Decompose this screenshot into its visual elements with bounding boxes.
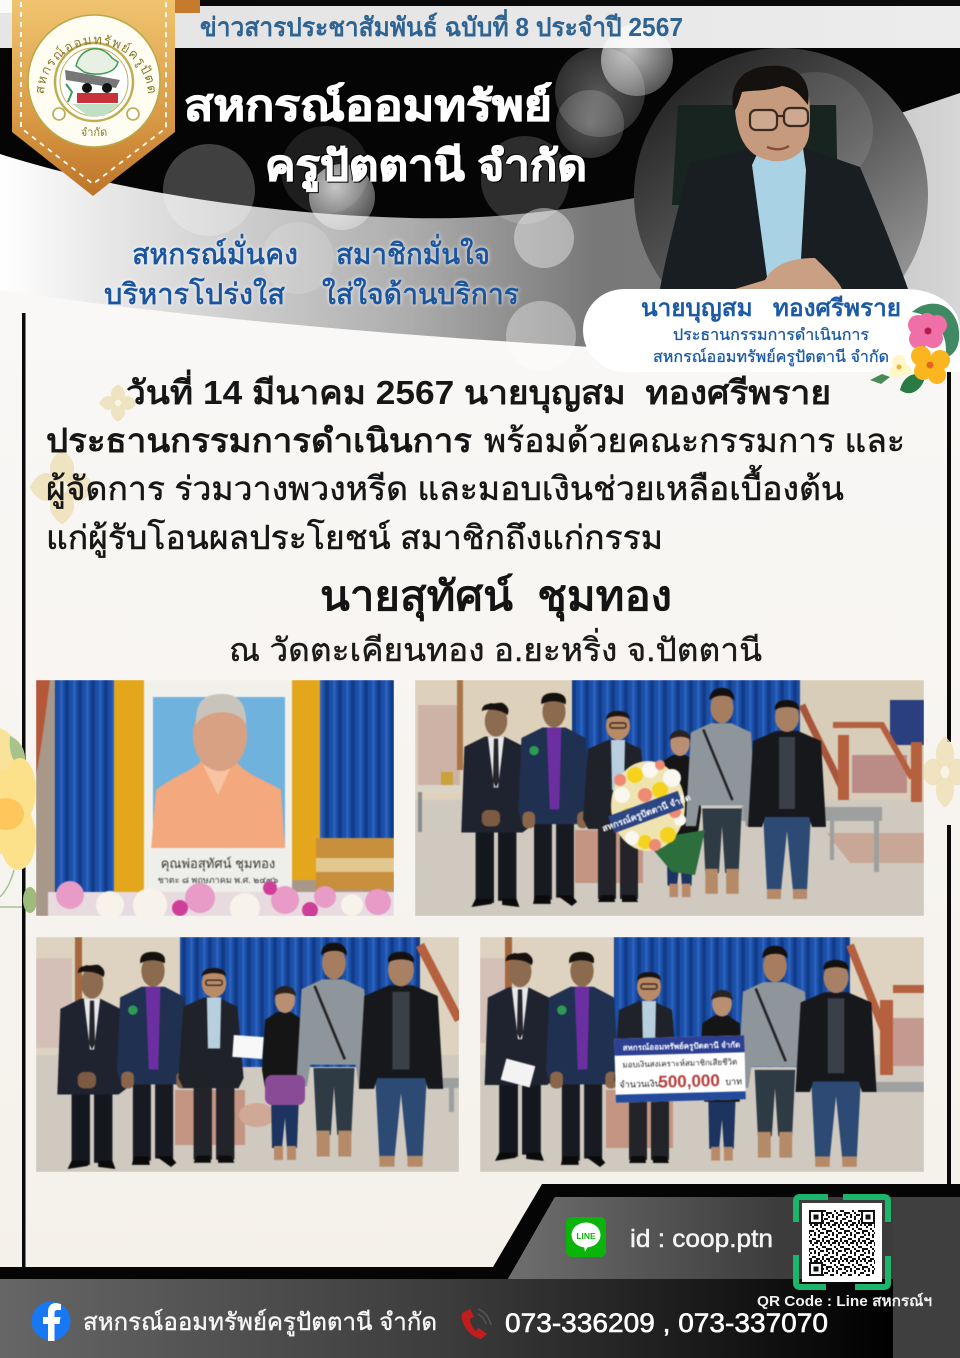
logo bottom text: จำกัด — [81, 127, 107, 139]
presentation board: 500,000 — [658, 1071, 720, 1092]
slogans: สมาชิกมั่นใจ — [336, 234, 490, 271]
logo ring text — [44, 44, 148, 96]
blue curtain — [571, 680, 801, 763]
window — [418, 705, 460, 790]
people — [485, 946, 877, 1167]
QR caption: QR Code : Line สหกรณ์ฯ — [757, 1292, 932, 1310]
presentation board: จำนวนเงิน — [619, 1079, 661, 1090]
bench — [870, 1082, 924, 1092]
flower arrangement — [48, 880, 394, 916]
newsletter issue line: ข่าวสารประชาสัมพันธ์ ฉบับที่ 8 ประจำปี 2567 — [200, 8, 683, 42]
grey gradient band — [0, 60, 960, 372]
pink cloth — [575, 830, 643, 883]
venue: ณ วัดตะเคียนทอง อ.ยะหริ่ง จ.ปัตตานี — [229, 628, 762, 668]
shirt — [752, 148, 806, 277]
slogans: ใส่ใจด้านบริการ — [322, 277, 519, 311]
organisation title: สหกรณ์ออมทรัพย์ — [184, 82, 552, 129]
facebook page name: สหกรณ์ออมทรัพย์ครูปัตตานี จำกัด — [83, 1308, 437, 1337]
top grey strip — [0, 13, 200, 48]
slogans: สหกรณ์มั่นคง — [132, 234, 298, 271]
ribbon tab — [173, 0, 200, 13]
presentation board: บาท — [725, 1076, 742, 1087]
face — [192, 712, 248, 772]
presentation board — [614, 1035, 746, 1103]
bench — [423, 1078, 459, 1088]
announcement text: ผู้จัดการ ร่วมวางพวงหรีด และมอบเงินช่วยเหลือเบื้องต้น — [46, 465, 844, 509]
funeral wreath — [599, 760, 705, 875]
line id: id : coop.ptn — [630, 1225, 773, 1253]
photo: portrait of the deceased — [36, 680, 394, 923]
shirt — [151, 760, 285, 850]
right fill — [893, 1197, 960, 1358]
blue curtain — [614, 937, 850, 1067]
black chevron outline — [0, 1184, 960, 1279]
bubbles — [163, 24, 673, 371]
presentation board: สหกรณ์ออมทรัพย์ครูปัตตานี จำกัด — [622, 1039, 740, 1053]
tropical flowers — [870, 304, 959, 393]
gold frame — [114, 680, 146, 900]
announcement text: พร้อมด้วยคณะกรรมการ และ — [484, 422, 905, 459]
photo: portrait of the deceased: คุณพ่อสุทัศน์ ชุมทอง — [161, 856, 275, 872]
pink cloth — [175, 1090, 245, 1145]
jacket — [660, 148, 908, 289]
stair rail — [420, 945, 459, 1020]
slogans — [104, 234, 519, 311]
chair — [672, 105, 838, 205]
bench — [741, 807, 882, 821]
hands — [735, 258, 842, 289]
QR code — [796, 1197, 888, 1287]
right stairs — [800, 680, 924, 802]
announcement text — [46, 369, 905, 558]
content frame lines — [22, 313, 951, 1273]
envelope — [232, 1035, 264, 1059]
decorative ornaments — [30, 384, 960, 808]
small table — [415, 785, 467, 792]
icon: LINE — [566, 1217, 606, 1257]
people — [461, 688, 826, 907]
photo: presenting cheque board — [480, 937, 924, 1172]
president organisation: สหกรณ์ออมทรัพย์ครูปัตตานี จำกัด — [653, 347, 889, 367]
wreath ribbon: สหกรณ์ครูปัตตานี จำกัด — [600, 791, 693, 835]
header background — [0, 0, 960, 372]
black curved banner — [0, 48, 960, 218]
backdrop circle — [634, 48, 928, 342]
handbag — [265, 1075, 305, 1105]
stitching — [21, 2, 166, 184]
grey panel — [508, 1197, 960, 1358]
footer band — [0, 1279, 893, 1358]
photo: group with wreath — [415, 680, 924, 916]
window — [480, 958, 505, 1043]
ribbon — [12, 0, 175, 196]
stair rail — [846, 943, 881, 1031]
photo: portrait of the deceased: ชาตะ ๘ พฤษภาคม พ.ศ. ๒๔๙๖ — [158, 875, 279, 885]
hair — [732, 66, 809, 112]
president role: ประธานกรรมการดำเนินการ — [673, 327, 869, 344]
gold cloth table — [316, 838, 394, 890]
plate — [583, 289, 960, 372]
deceased member name: นายสุทัศน์ ชุมทอง — [320, 573, 672, 622]
organisation title: ครูปัตตานี จำกัด — [265, 142, 587, 192]
top black strip — [200, 0, 960, 6]
announcement text: วันที่ 14 มีนาคม 2567 นายบุญสม ทองศรีพราย — [126, 369, 831, 414]
left yellow flower — [0, 728, 37, 913]
organisation title — [184, 82, 587, 192]
floor spot — [239, 1103, 275, 1127]
caption card — [152, 847, 286, 888]
blue curtain — [54, 680, 115, 893]
icon: phone — [462, 1309, 491, 1339]
logo seal — [27, 14, 161, 148]
phone numbers: 073-336209 , 073-337070 — [505, 1308, 828, 1338]
people — [57, 943, 443, 1169]
pink cloth — [606, 1090, 673, 1148]
mouth — [767, 146, 789, 149]
name plate — [583, 289, 960, 393]
icon: Facebook — [32, 1302, 70, 1341]
presentation board: มอบเงินสงเคราะห์สมาชิกเสียชีวิต — [622, 1057, 737, 1070]
portrait poster — [144, 680, 292, 900]
announcement text: แก่ผู้รับโอนผลประโยชน์ สมาชิกถึงแก่กรรม — [46, 519, 663, 558]
floor — [415, 800, 924, 916]
floor pattern — [827, 833, 924, 863]
head — [735, 68, 810, 161]
window — [36, 958, 72, 1048]
icon: LINE: LINE — [576, 1231, 596, 1241]
top white area — [0, 0, 200, 13]
announcement text: ประธานกรรมการดำเนินการ — [46, 422, 472, 459]
glasses — [750, 108, 808, 130]
envelope — [501, 1058, 535, 1088]
blue curtain — [180, 937, 420, 1067]
photo: handing over envelope — [36, 937, 459, 1172]
slogans: บริหารโปร่งใส — [104, 277, 285, 311]
offering urn — [440, 771, 454, 786]
badge ribbon with logo — [12, 0, 200, 196]
president name: นายบุญสม ทองศรีพราย — [641, 295, 901, 324]
president portrait — [634, 48, 928, 342]
contact panel — [0, 1184, 960, 1358]
